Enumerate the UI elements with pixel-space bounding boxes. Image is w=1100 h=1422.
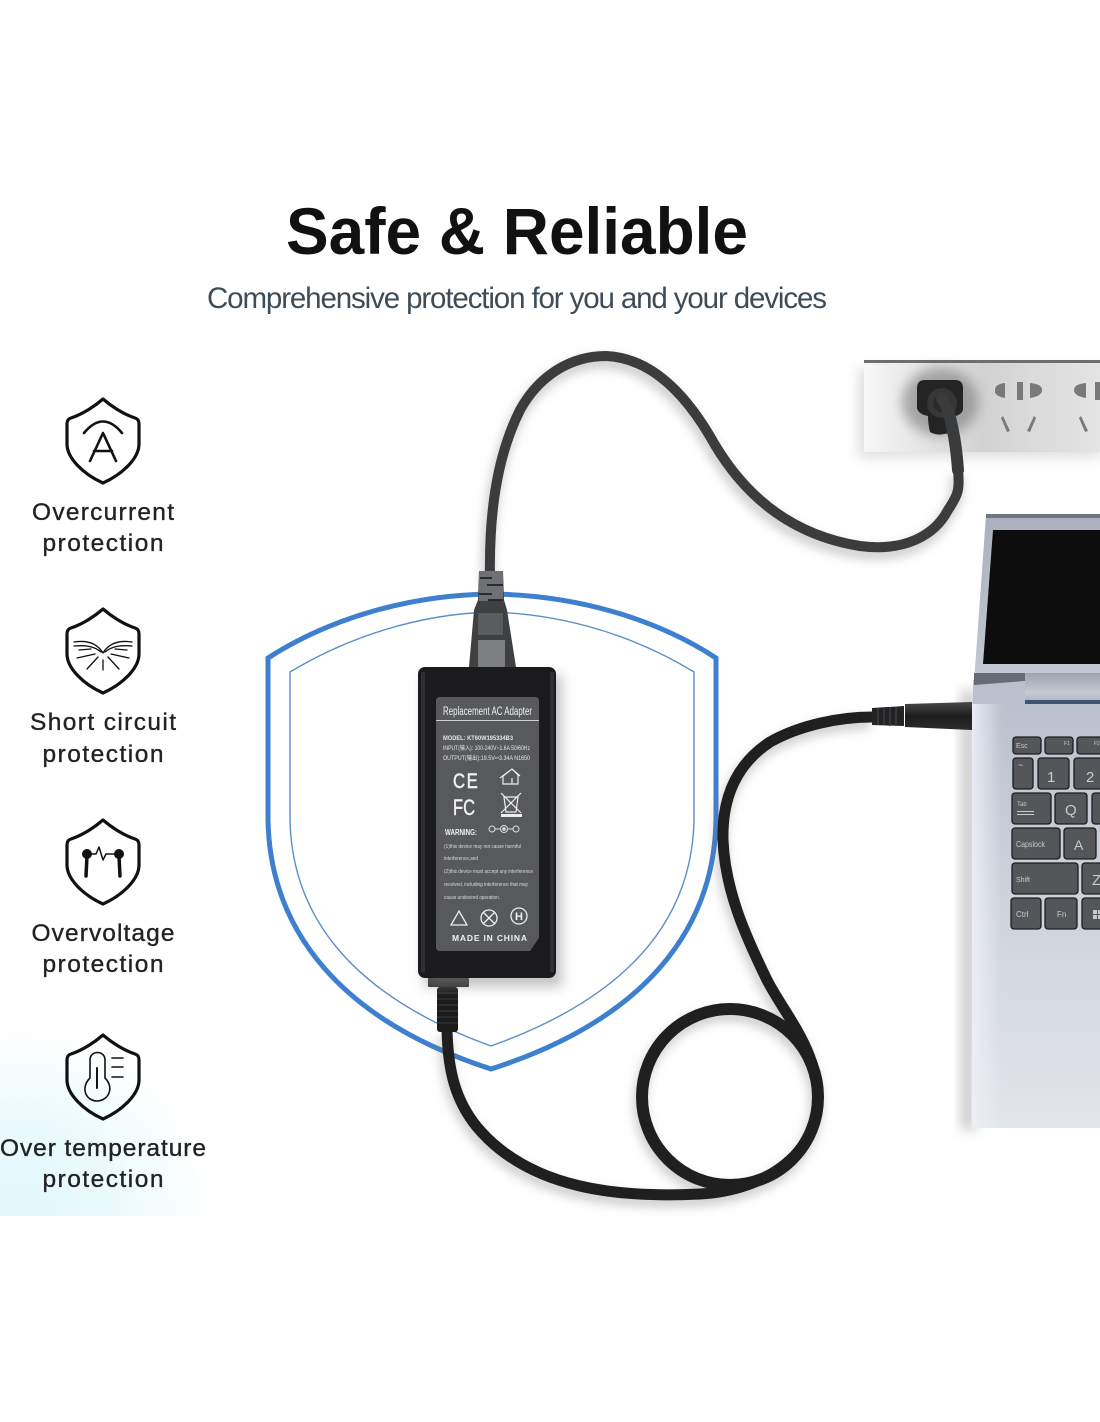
AC connector — [469, 571, 516, 667]
warning heading: WARNING: — [445, 828, 477, 837]
laptop body — [971, 680, 1100, 1128]
laptop hinge — [974, 673, 1025, 685]
warning text: received, including interference that may — [444, 882, 528, 888]
label heading: Replacement AC Adapter — [443, 706, 532, 718]
label: over temperature: Over temperature — [0, 1135, 206, 1162]
icon: WEEE bin — [501, 793, 522, 817]
FC mark: FC — [453, 795, 475, 820]
label specification: INPUT(输入): 100-240V~1.6A 50/60Hz — [443, 744, 530, 752]
label: short circuit: Short circuit — [30, 709, 176, 736]
warning text: (2)this device must accept any interference — [444, 869, 533, 875]
key legends: Esc — [1016, 743, 1028, 750]
background tint — [0, 1000, 215, 1216]
key legends: Tab — [1017, 802, 1027, 808]
label: overvoltage: Overvoltage — [32, 920, 174, 947]
icon: short circuit shield — [67, 609, 139, 693]
adapter label plate — [436, 697, 539, 951]
label specification — [443, 736, 531, 762]
title: Safe & Reliable — [286, 194, 748, 268]
warning text: interference,and — [444, 856, 478, 862]
label: overcurrent protection: protection — [42, 530, 164, 557]
label: overvoltage protection: protection — [42, 951, 164, 978]
key legends: 2 — [1086, 769, 1094, 786]
DC cable — [447, 717, 872, 1195]
label specification: MODEL: KT60W195334B3 — [443, 736, 514, 742]
key legends: Shift — [1016, 877, 1030, 884]
label: short circuit protection: protection — [42, 741, 164, 768]
power cable — [490, 356, 959, 578]
icon: polarity — [489, 826, 519, 832]
DC plug — [872, 702, 972, 730]
key legends: Capslock — [1016, 840, 1046, 849]
icon: overcurrent shield — [67, 399, 139, 483]
laptop screen — [983, 530, 1100, 664]
wall plug — [917, 380, 963, 435]
power strip — [858, 360, 1100, 458]
safety icons — [451, 908, 527, 926]
laptop lid — [974, 515, 1100, 682]
keyboard — [1011, 737, 1100, 929]
DC strain relief — [428, 978, 469, 1032]
key legends: Fn — [1057, 910, 1066, 919]
DC cable loop — [642, 1009, 818, 1185]
key legends: 1 — [1047, 769, 1055, 786]
socket pins — [995, 382, 1100, 432]
label specification: OUTPUT(输出):19.5V⎓3.34A N1650 — [443, 754, 531, 762]
made in china: MADE IN CHINA — [452, 933, 527, 943]
key legends: F2 — [1094, 741, 1100, 747]
key legends: ~ — [1018, 760, 1023, 770]
key legends — [1016, 741, 1100, 919]
cable shadows — [445, 362, 957, 1201]
key legends: Q — [1065, 802, 1077, 819]
subtitle: Comprehensive protection for you and your devices — [207, 282, 827, 315]
key legends: A — [1074, 837, 1084, 853]
shield outline — [268, 594, 716, 1069]
adapter — [418, 667, 562, 987]
plug shadow — [902, 368, 978, 436]
key legends: F1 — [1064, 741, 1070, 747]
key legends: Ctrl — [1016, 910, 1029, 919]
CE mark: CE — [453, 770, 478, 794]
icon: indoor use — [500, 769, 520, 784]
icon: over temperature shield — [67, 1035, 139, 1119]
H mark: H — [515, 911, 523, 923]
power cable front — [942, 398, 958, 470]
label: overcurrent: Overcurrent — [32, 499, 174, 526]
label: over temperature protection: protection — [42, 1166, 164, 1193]
laptop — [960, 514, 1100, 1130]
icon: overvoltage shield — [67, 820, 139, 904]
warning text — [444, 844, 533, 901]
warning text: cause undesired operation. — [444, 895, 500, 901]
warning text: (1)this device may not cause harmful — [444, 844, 521, 850]
